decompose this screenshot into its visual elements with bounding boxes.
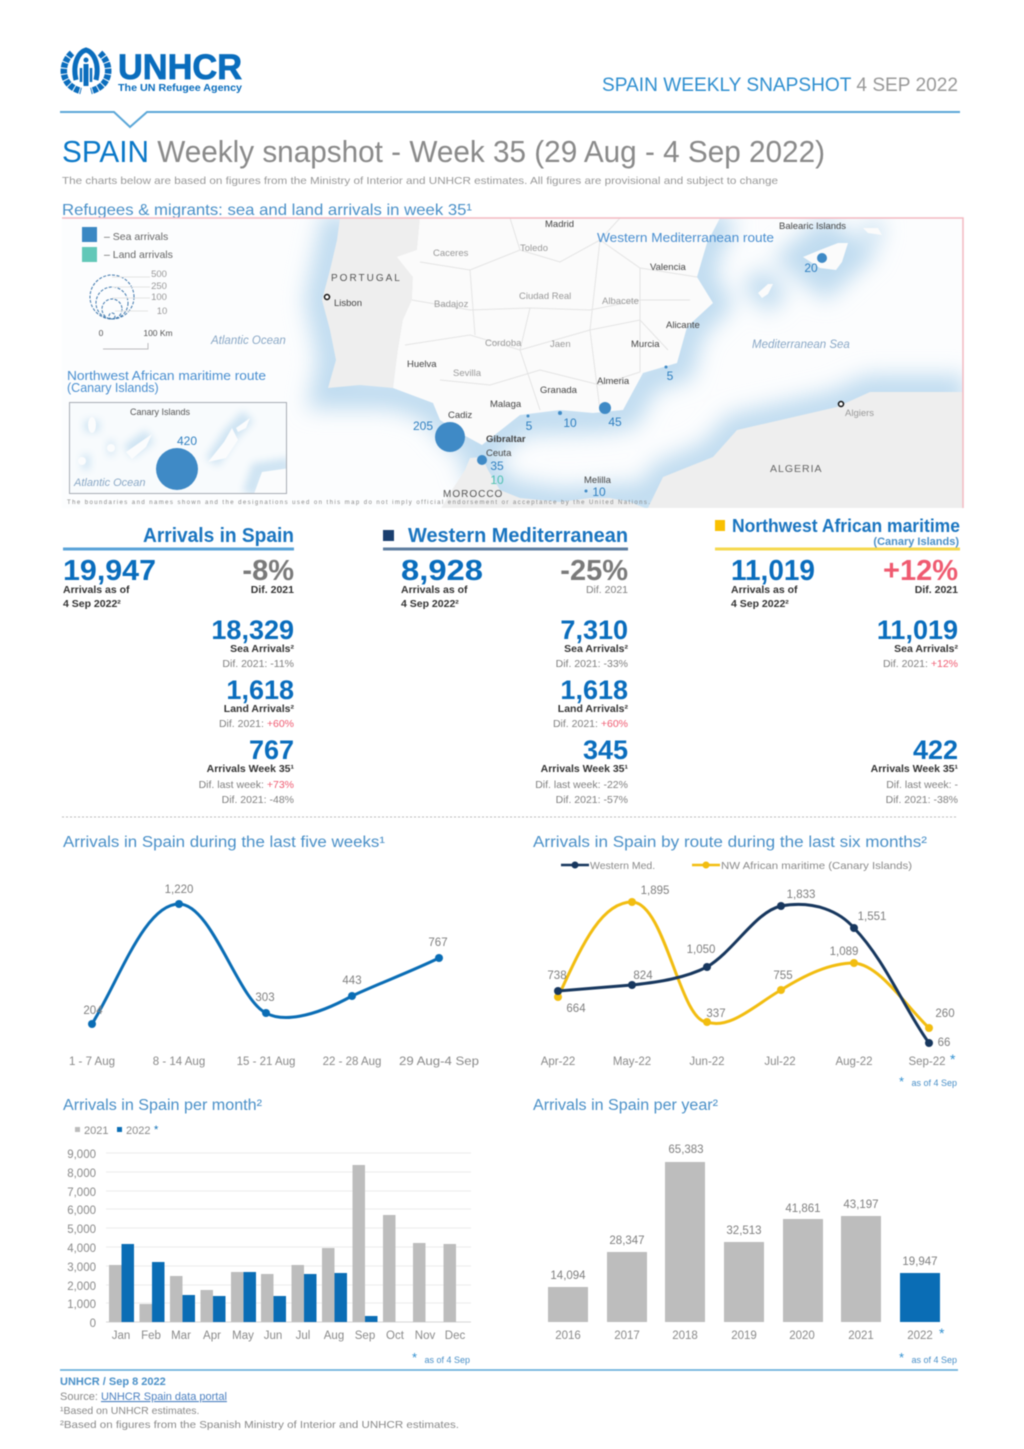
total arrivals (63, 555, 156, 610)
bubbles: arrivals: 45 (608, 415, 622, 429)
bar chart: per year: 19,947 (902, 1256, 938, 1268)
bubble: Canary Islands 420 (156, 434, 198, 490)
line chart: routes: May-22 (613, 1056, 651, 1068)
map labels: Almeria (597, 376, 630, 387)
line chart: last five weeks: 1 - 7 Aug (69, 1056, 115, 1068)
difference with 2021: +12% (883, 555, 958, 587)
land: Portugal (322, 218, 420, 388)
land: Algeria (647, 392, 965, 510)
sea arrivals: Sea Arrivals² (564, 643, 628, 655)
difference with 2021: -8% (242, 555, 294, 587)
legend: route chart: NW African maritime (Canary Islands) (721, 860, 912, 872)
land arrivals: 1,618 (560, 675, 628, 705)
line chart: routes: * (950, 1051, 956, 1067)
weekly arrivals: Dif. last week: +73% (199, 779, 294, 791)
bar chart: per month: Jun (264, 1330, 282, 1342)
line chart: routes: as of 4 Sep (911, 1078, 957, 1088)
bar chart: per month: Nov (415, 1330, 435, 1342)
map labels: Toledo (520, 243, 548, 254)
inset: Canary Islands: Atlantic Ocean (73, 477, 146, 489)
bar chart: per month: Feb (141, 1330, 161, 1342)
bar chart: per year: 2020 (789, 1330, 815, 1342)
total arrivals: 4 Sep 2022² (731, 598, 789, 610)
total arrivals: Arrivals as of (401, 584, 468, 596)
series: NW African maritime (554, 898, 933, 1032)
line chart: last five weeks: 15 - 21 Aug (237, 1056, 295, 1068)
map labels: Alicante (666, 320, 700, 331)
map labels: MOROCCO (443, 489, 503, 500)
bar chart: per month: Jan (112, 1330, 130, 1342)
bubbles: arrivals: 5 (526, 419, 533, 433)
line chart: routes: 337 (706, 1008, 726, 1020)
bar chart: per year: 41,861 (785, 1203, 821, 1215)
weekly arrivals (199, 735, 295, 806)
map labels: Cordoba (485, 338, 522, 349)
bar chart: per month: Sep (355, 1330, 375, 1342)
line chart: last five weeks: 303 (255, 992, 275, 1004)
line chart: last five weeks: 443 (342, 975, 362, 987)
subtitle: The charts below are based on figures from the Ministry of Interior and UNHCR estimates. All figures are provisional and subject to change (62, 175, 778, 187)
header rule with notch (60, 112, 960, 127)
legend: arrival type: – Sea arrivals (104, 231, 168, 243)
map labels: Algiers (845, 408, 874, 419)
bar chart: per year: 2018 (672, 1330, 698, 1342)
total arrivals: 11,019 (731, 555, 815, 587)
map labels: Sevilla (453, 368, 482, 379)
route label: northwest african: (Canary Islands) (67, 381, 159, 395)
header label: SPAIN WEEKLY SNAPSHOT 4 SEP 2022 (602, 75, 958, 96)
weekly arrivals: 422 (913, 735, 958, 765)
heading: Arrivals in Spain (143, 525, 294, 547)
bubbles: arrivals: 10 (490, 473, 504, 487)
difference with 2021: Dif. 2021 (915, 584, 958, 596)
total arrivals (401, 555, 483, 610)
map labels: Huelva (407, 359, 437, 370)
scale bar: 100 Km (143, 328, 173, 338)
line chart: last five weeks: 767 (428, 937, 448, 949)
heading: route chart: Arrivals in Spain by route during the last six months² (533, 834, 927, 851)
difference with 2021: Dif. 2021 (251, 584, 294, 596)
weekly arrivals: Arrivals Week 35¹ (207, 763, 295, 775)
legend: circle size: 250 (151, 281, 167, 292)
sea arrivals: Dif. 2021: +12% (883, 658, 958, 670)
bar chart: per month: 6,000 (67, 1205, 96, 1217)
map labels: Gibraltar (486, 434, 526, 445)
total arrivals: 4 Sep 2022² (401, 598, 459, 610)
sea arrivals (211, 615, 294, 670)
bar chart: per year: * (939, 1325, 945, 1341)
route label: western mediterranean: Western Mediterranean route (597, 231, 774, 245)
bars 2022 (122, 1244, 378, 1322)
map labels: Ciudad Real (519, 291, 571, 302)
map labels: Mediterranean Sea (752, 339, 850, 351)
bar chart: per month: 0 (90, 1318, 96, 1330)
title: SPAIN Weekly snapshot - Week 35 (29 Aug - 4 Sep 2022) (62, 134, 825, 169)
bar chart: per month (67, 1149, 471, 1365)
map border (62, 218, 963, 508)
footnote 2: ²Based on figures from the Spanish Ministry of Interior and UNHCR estimates. (60, 1419, 459, 1431)
sea arrivals: 18,329 (211, 615, 294, 645)
map labels: Atlantic Ocean (210, 335, 286, 347)
bubbles: arrivals: 35 (490, 459, 504, 473)
weekly arrivals: Dif. last week: - (886, 779, 958, 791)
bar chart: per month: Aug (324, 1330, 344, 1342)
map labels: ALGERIA (770, 463, 823, 475)
legend: circle size (90, 269, 167, 319)
land arrivals (219, 675, 294, 730)
bar chart: per month: 8,000 (67, 1168, 96, 1180)
weekly arrivals: Arrivals Week 35¹ (541, 763, 629, 775)
map labels: Albacete (602, 296, 639, 307)
sea arrivals: 11,019 (877, 615, 958, 645)
legend: per month chart (75, 1124, 159, 1137)
legend: per month chart: 2021 (84, 1125, 108, 1137)
heading: five weeks chart: Arrivals in Spain during the last five weeks¹ (63, 834, 385, 851)
map labels: Lisbon (334, 298, 362, 309)
heading: per month chart: Arrivals in Spain per month² (63, 1097, 262, 1114)
bubbles: arrivals (413, 253, 827, 499)
total arrivals: Arrivals as of (63, 584, 130, 596)
legend: arrival type: – Land arrivals (104, 249, 173, 261)
bar chart: per year: 14,094 (550, 1270, 586, 1282)
total arrivals (731, 555, 815, 610)
map labels: Granada (540, 385, 578, 396)
weekly arrivals: Arrivals Week 35¹ (871, 763, 959, 775)
bubbles: arrivals: 205 (413, 419, 433, 433)
land arrivals: Dif. 2021: +60% (219, 718, 294, 730)
route label: northwest african: Northwest African maritime route (67, 369, 266, 383)
bars 2021 (109, 1165, 456, 1322)
bar chart: per year: 2019 (731, 1330, 757, 1342)
legend: route chart: Western Med. (590, 860, 655, 872)
bar chart: per month: 1,000 (67, 1299, 96, 1311)
weekly arrivals (871, 735, 959, 806)
line chart: routes: Apr-22 (541, 1056, 575, 1068)
map labels: Ceuta (486, 448, 512, 459)
wordmark: UNHCR (118, 48, 242, 87)
sea arrivals: Sea Arrivals² (230, 643, 294, 655)
bar chart: per month: 2,000 (67, 1281, 96, 1293)
tagline: The UN Refugee Agency (118, 82, 242, 94)
line chart: routes: Jun-22 (689, 1056, 725, 1068)
legend: circle size: 100 (151, 292, 167, 303)
bar chart: per year: 32,513 (726, 1225, 762, 1237)
bar chart: per month: as of 4 Sep (424, 1355, 470, 1365)
weekly arrivals: 767 (249, 735, 294, 765)
bubbles: arrivals: 5 (667, 369, 674, 383)
line chart: last five weeks: 8 - 14 Aug (153, 1056, 205, 1068)
land: Balearic Islands (758, 228, 882, 298)
heading: per year chart: Arrivals in Spain per year² (533, 1097, 718, 1114)
sea arrivals: 7,310 (560, 615, 628, 645)
line chart: routes: 824 (633, 970, 653, 982)
line chart: last five weeks: 29 Aug-4 Sep (399, 1056, 479, 1068)
heading: Northwest African maritime (732, 515, 960, 536)
land arrivals (553, 675, 628, 730)
province borders (405, 218, 697, 410)
series: Western Med (554, 902, 933, 1047)
legend: circle size: 10 (157, 306, 167, 317)
map labels: Badajoz (434, 299, 469, 310)
footnote 1: ¹Based on UNHCR estimates. (60, 1405, 199, 1417)
legend: arrival type (82, 227, 173, 262)
weekly arrivals: 345 (583, 735, 628, 765)
footer (60, 1376, 459, 1431)
line chart: last five weeks: 1,220 (165, 884, 193, 896)
weekly arrivals: Dif. 2021: -57% (556, 794, 628, 806)
map attribution: The boundaries and names shown and the designations used on this map do not imply official endorsement or acceptance by the United Nations. (67, 500, 650, 506)
difference with 2021: -25% (560, 555, 628, 587)
bar chart: per year: 2022 (907, 1330, 933, 1342)
bar chart: per year: 2016 (555, 1330, 581, 1342)
bar chart: per year: 28,347 (609, 1235, 645, 1247)
map labels: Jaen (550, 339, 571, 350)
bar chart: per month: 3,000 (67, 1262, 96, 1274)
difference with 2021: Dif. 2021 (586, 584, 628, 596)
map labels: Cadiz (448, 410, 473, 421)
map labels: Valencia (650, 262, 686, 273)
line chart: routes: Aug-22 (835, 1056, 873, 1068)
bar chart: per month: 9,000 (67, 1149, 96, 1161)
bar chart: per month: Oct (386, 1330, 405, 1342)
line chart: routes: Jul-22 (764, 1056, 796, 1068)
bubble: Canary Islands 420: 420 (177, 434, 197, 448)
bar chart: per month: Apr (203, 1330, 221, 1342)
weekly arrivals: Dif. 2021: -38% (886, 794, 958, 806)
map labels: PORTUGAL (331, 273, 402, 284)
sea arrivals (556, 615, 628, 670)
sea arrivals: Dif. 2021: -11% (222, 658, 294, 670)
line chart: last five weeks (69, 884, 479, 1068)
footer date: UNHCR / Sep 8 2022 (60, 1376, 166, 1388)
weekly arrivals (535, 735, 629, 806)
bar chart: per year: 65,383 (668, 1144, 704, 1156)
total arrivals: Arrivals as of (731, 584, 798, 596)
map labels: Malaga (490, 399, 522, 410)
legend: per month chart: 2022 (126, 1125, 150, 1137)
map labels: Madrid (545, 219, 574, 230)
sea arrivals (877, 615, 958, 670)
land arrivals: 1,618 (226, 675, 294, 705)
line chart: routes (541, 885, 957, 1089)
bar chart: per month: Dec (445, 1330, 465, 1342)
legend: circle size: 500 (151, 269, 167, 280)
line chart: routes: 1,050 (687, 944, 715, 956)
scale bar: 0 (99, 328, 104, 338)
bar chart: per month: May (232, 1330, 254, 1342)
sea arrivals: Sea Arrivals² (894, 643, 958, 655)
heading: (Canary Islands) (873, 536, 959, 548)
map labels: Balearic Islands (779, 221, 846, 232)
weekly arrivals: Dif. 2021: -48% (222, 794, 294, 806)
legend: route chart (561, 860, 912, 872)
line chart: routes: 66 (938, 1037, 950, 1049)
map heading: Refugees & migrants: sea and land arrivals in week 35¹ (62, 202, 472, 219)
bar chart: per month: Jul (296, 1330, 310, 1342)
inset: Canary Islands: Canary Islands (130, 407, 191, 417)
bar chart: per month: 7,000 (67, 1187, 96, 1199)
line chart: routes: 260 (935, 1008, 955, 1020)
line chart: routes: 1,895 (641, 885, 669, 897)
inset: Canary Islands (70, 402, 290, 494)
legend: per month chart: * (154, 1124, 159, 1136)
total arrivals: 8,928 (401, 555, 483, 587)
land: Spain (393, 218, 720, 445)
weekly arrivals: Dif. last week: -22% (535, 779, 628, 791)
land: Morocco (440, 457, 650, 510)
map labels: Murcia (631, 339, 660, 350)
bar chart: per month: 4,000 (67, 1243, 96, 1255)
sea arrivals: Dif. 2021: -33% (556, 658, 628, 670)
line chart: routes: 738 (547, 970, 567, 982)
line chart: routes: * (899, 1074, 904, 1089)
bar chart: per year: * (899, 1350, 904, 1365)
total arrivals: 19,947 (63, 555, 156, 587)
logo: UNHCR (64, 48, 242, 94)
bar chart: per month: Mar (171, 1330, 191, 1342)
map labels (210, 219, 874, 500)
scale bar (99, 328, 173, 349)
bubbles: arrivals: 20 (804, 261, 818, 275)
line chart: routes: 1,089 (830, 946, 858, 958)
land arrivals: Land Arrivals² (558, 703, 628, 715)
bar chart: per year: as of 4 Sep (911, 1355, 957, 1365)
bar chart: per year: 43,197 (843, 1199, 879, 1211)
bar chart: per year: 2021 (848, 1330, 874, 1342)
bar chart: per month: 5,000 (67, 1224, 96, 1236)
land arrivals: Dif. 2021: +60% (553, 718, 628, 730)
line chart: routes: 1,833 (787, 889, 815, 901)
line chart: routes: Sep-22 (908, 1056, 946, 1068)
bubbles: arrivals: 10 (592, 485, 606, 499)
heading: Western Mediterranean (408, 525, 628, 547)
panel: map (62, 215, 965, 510)
bar chart: per month: * (412, 1350, 417, 1365)
bar chart: per year (548, 1144, 957, 1365)
land arrivals: Land Arrivals² (224, 703, 294, 715)
map labels: Melilla (584, 475, 612, 486)
map labels: Caceres (433, 248, 469, 259)
footer source: Source: UNHCR Spain data portal (60, 1391, 227, 1403)
bubbles: arrivals: 10 (563, 416, 577, 430)
line chart: routes: 1,551 (858, 911, 886, 923)
icon: UNHCR emblem (64, 50, 108, 91)
line chart: last five weeks: 204 (83, 1005, 103, 1017)
panel: Northwest African maritime (715, 515, 960, 806)
line chart: routes: 755 (773, 970, 793, 982)
total arrivals: 4 Sep 2022² (63, 598, 121, 610)
panel: Arrivals in Spain (63, 525, 295, 806)
sea halo along coasts (322, 215, 965, 505)
panel: Western Mediterranean (383, 525, 629, 806)
heading (715, 515, 960, 548)
route label: northwest african (67, 369, 266, 395)
line chart: last five weeks: 22 - 28 Aug (323, 1056, 381, 1068)
line chart: routes: 664 (566, 1003, 586, 1015)
bar chart: per year: 2017 (614, 1330, 640, 1342)
